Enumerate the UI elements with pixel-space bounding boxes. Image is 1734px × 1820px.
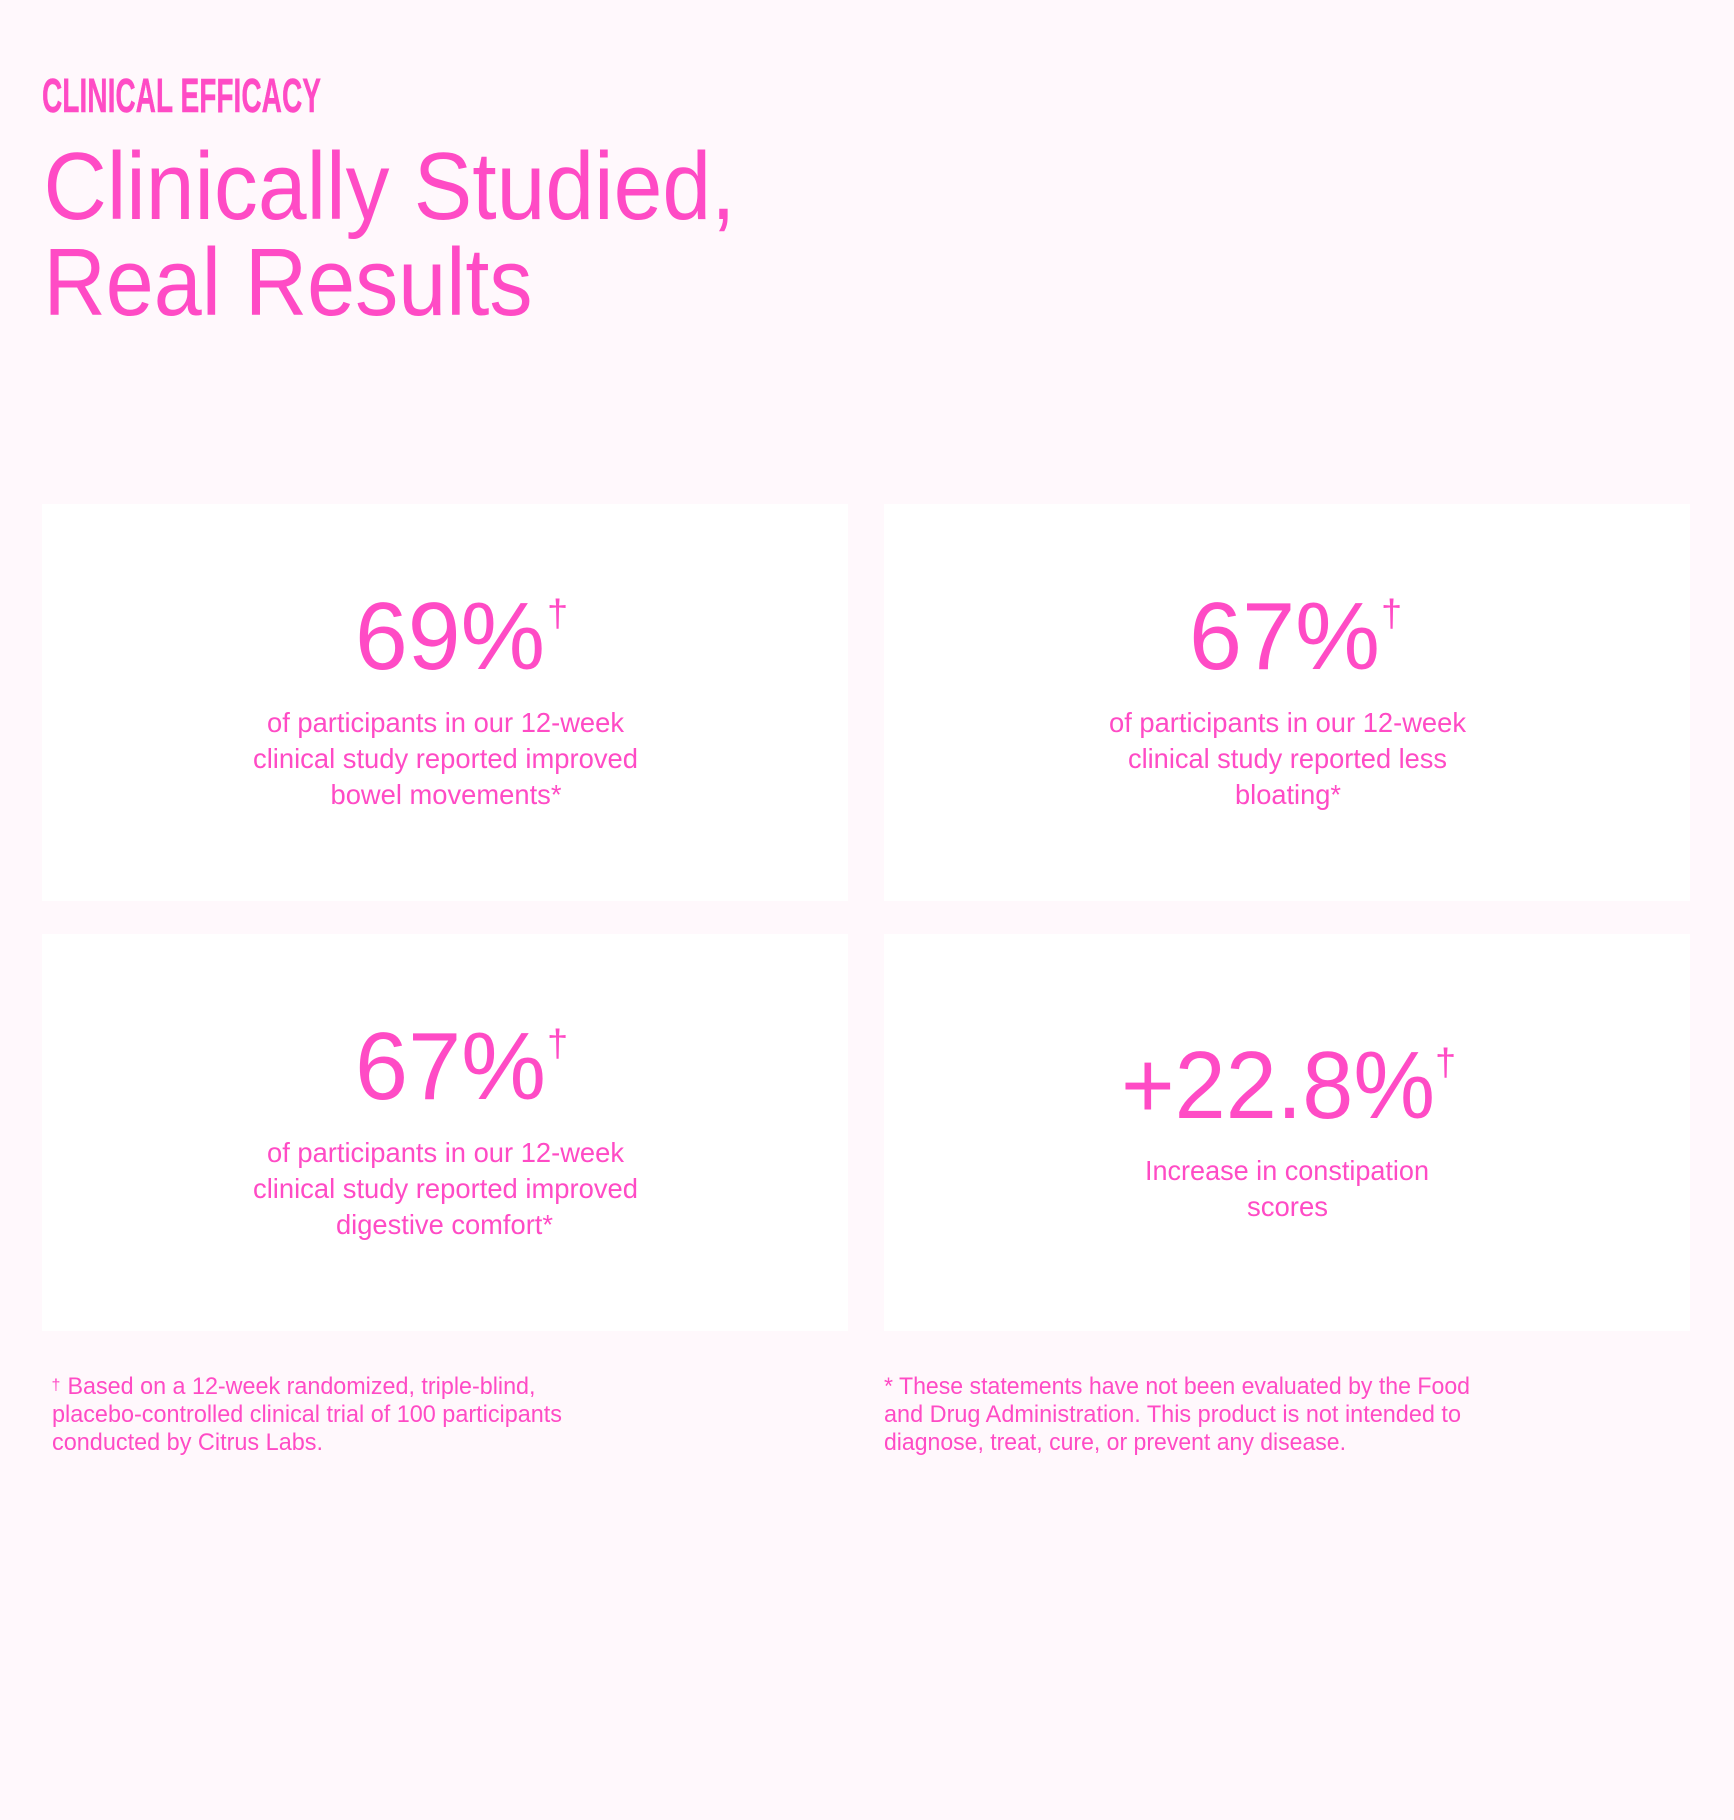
description: clinical study reported less bbox=[1128, 743, 1447, 774]
panel: 67% digestive comfort bbox=[42, 934, 848, 1331]
description: bloating* bbox=[1235, 779, 1341, 810]
stat: 67%: 67% bbox=[355, 1013, 546, 1120]
panel: 69% bowel movements bbox=[42, 504, 848, 901]
footnote: dagger study basis: Based on a 12-week randomized, triple-blind, bbox=[68, 1373, 536, 1400]
stat: +22.8%: +22.8% bbox=[1121, 1032, 1435, 1139]
card background bbox=[42, 504, 848, 901]
title: Clinically Studied, bbox=[44, 133, 736, 240]
stat: +22.8%: † bbox=[1435, 1042, 1456, 1084]
footnote: dagger study basis: conducted by Citrus Labs. bbox=[52, 1429, 323, 1456]
description: of participants in our 12-week bbox=[267, 1137, 625, 1168]
description: of participants in our 12-week bbox=[1109, 707, 1467, 738]
card background bbox=[42, 934, 848, 1331]
footnote: dagger study basis: † bbox=[52, 1377, 60, 1394]
stat: 67%: † bbox=[547, 1023, 568, 1065]
panel: +22.8% constipation scores bbox=[884, 934, 1690, 1331]
description: clinical study reported improved bbox=[253, 1173, 638, 1204]
stat: 69%: 69% bbox=[355, 583, 545, 690]
stat: 67%: 67% bbox=[1189, 583, 1380, 690]
stat: 69%: † bbox=[547, 593, 568, 635]
description: scores bbox=[1247, 1191, 1328, 1222]
stat: 67%: † bbox=[1381, 593, 1402, 635]
card background bbox=[884, 934, 1690, 1331]
footnote: FDA disclaimer: * These statements have not been evaluated by the Food bbox=[884, 1373, 1470, 1400]
card background bbox=[884, 504, 1690, 901]
title bbox=[44, 133, 736, 336]
description: Increase in constipation bbox=[1145, 1155, 1429, 1186]
eyebrow label: CLINICAL EFFICACY bbox=[42, 70, 321, 123]
description bbox=[1109, 707, 1467, 810]
title: Real Results bbox=[44, 229, 532, 336]
description bbox=[253, 1137, 638, 1240]
description: digestive comfort* bbox=[336, 1209, 553, 1240]
footnote: FDA disclaimer bbox=[884, 1373, 1470, 1456]
description bbox=[1145, 1155, 1429, 1222]
footnote: FDA disclaimer: diagnose, treat, cure, or prevent any disease. bbox=[884, 1429, 1346, 1456]
description: bowel movements* bbox=[330, 779, 562, 810]
footnote: FDA disclaimer: and Drug Administration. This product is not intended to bbox=[884, 1401, 1461, 1428]
footnote: dagger study basis bbox=[52, 1373, 562, 1456]
description: clinical study reported improved bbox=[253, 743, 638, 774]
panel: 67% less bloating bbox=[884, 504, 1690, 901]
footnote: dagger study basis: placebo-controlled clinical trial of 100 participants bbox=[52, 1401, 562, 1428]
description bbox=[253, 707, 638, 810]
description: of participants in our 12-week bbox=[267, 707, 625, 738]
